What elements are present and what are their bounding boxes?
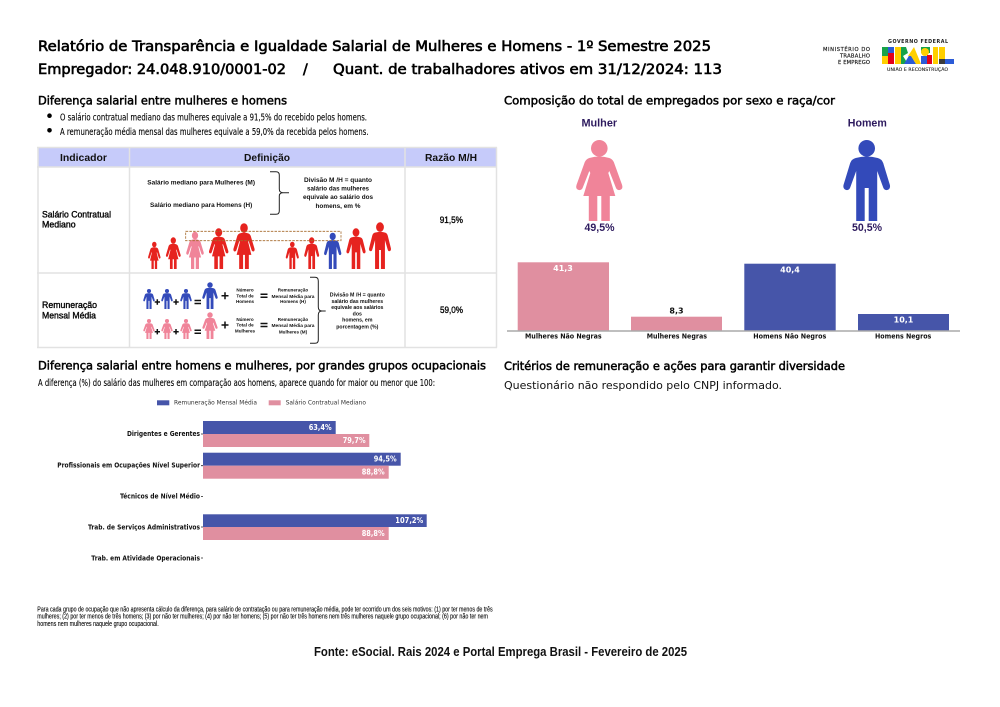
formula labels: Remuneração — [278, 317, 308, 322]
legend: Salário Contratual Mediano — [286, 399, 366, 407]
table header — [60, 152, 477, 164]
bar chart: sexo e raça: Homens Negros — [875, 332, 931, 340]
logo: governo federal brasil — [882, 39, 954, 73]
formula labels: Mulheres (M) — [279, 330, 308, 334]
table — [37, 148, 497, 348]
footnote: homens nem mulheres naquele grupo ocupacional. — [37, 621, 159, 628]
definição: divisão M/H — [303, 177, 374, 210]
definição: salário mediano — [147, 179, 255, 209]
panel: composição — [504, 93, 960, 340]
definição: divisão M/H: equivale aos salários — [331, 305, 384, 311]
title: / — [303, 62, 308, 78]
footnote — [37, 606, 493, 628]
logo: ministério: MINISTÉRIO DO — [823, 45, 870, 53]
icons: men sum — [143, 282, 218, 309]
definição: divisão M/H: salário das mulheres — [307, 186, 370, 192]
heading: critérios: Critérios de remuneração e ações para garantir diversidade — [504, 359, 845, 373]
title: Quant. de trabalhadores ativos em 31/12/2024: 113 — [333, 62, 722, 78]
bar chart: grupos ocupacionais — [57, 421, 427, 562]
row label: salário contratual mediano — [42, 210, 111, 230]
table header: Definição — [244, 152, 290, 164]
row label: remuneração mensal média — [42, 300, 97, 321]
logo: governo federal brasil: UNIÃO E RECONSTRUÇÃO — [887, 66, 948, 73]
bar chart: sexo e raça: Homens Não Negros — [753, 332, 826, 340]
definição: divisão M/H: homens, em — [342, 318, 373, 324]
footnote: Para cada grupo de ocupação que não apresenta cálculo da diferença, para salário de contratação ou para remuneração média, pode ter ocorrido um dos seis motivos: (1) por ter menos de três — [37, 606, 493, 613]
logo: ministério — [823, 45, 870, 66]
bar chart: grupos ocupacionais: Trab. em Atividade Operacionais — [91, 554, 200, 562]
definição: divisão M/H: porcentagem (%) — [336, 324, 379, 330]
formula labels: Mensal Média para — [272, 294, 315, 299]
pictogram: homem: Homem — [848, 118, 887, 130]
bar chart: grupos ocupacionais: 88,8% — [362, 529, 385, 538]
brace — [310, 277, 326, 343]
table header: Razão M/H — [425, 152, 477, 164]
footnote: mulheres; (2) por ter menos de três homens; (3) por não ter mulheres; (4) por não ter homens; (5) por não ter três homens nem três mulheres naquele grupo ocupacional; (6) por não ter nem — [37, 614, 488, 621]
text block: nota: A diferença (%) do salário das mulheres em comparação aos homens, aparece quando for maior ou menor que 100: — [38, 377, 435, 389]
definição: divisão M/H: equivale ao salário dos — [303, 194, 374, 201]
legend — [157, 399, 366, 407]
operators — [155, 292, 268, 334]
bar chart: grupos ocupacionais: Dirigentes e Gerentes — [127, 430, 200, 438]
icons: women figures — [148, 223, 255, 269]
bar chart: grupos ocupacionais: 94,5% — [374, 454, 397, 463]
definição: divisão M/H: Divisão M /H = quanto — [304, 177, 372, 184]
value: 59,0%: 59,0% — [440, 305, 463, 316]
formula labels: Total de — [236, 322, 254, 328]
formula labels: Remuneração — [278, 288, 308, 292]
formula labels: Homens — [236, 299, 255, 304]
bar chart: sexo e raça: 40,4 — [780, 266, 800, 275]
row label: remuneração mensal média: Remuneração — [42, 300, 97, 310]
text block: bullet list: O salário contratual mediano das mulheres equivale a 91,5% do recebido pelos homens. — [60, 112, 367, 124]
bar chart: sexo e raça — [507, 262, 960, 340]
pictogram: mulher — [576, 118, 622, 234]
definição: divisão M/H: homens, em % — [316, 203, 361, 210]
heading: grupos ocupacionais: Diferença salarial entre homens e mulheres, por grandes grupos ocupacionais — [38, 358, 486, 372]
panel: grupos ocupacionais — [37, 358, 493, 628]
bar chart: grupos ocupacionais: Trab. de Serviços Administrativos — [88, 523, 200, 531]
definição: salário mediano: Salário mediano para Homens (H) — [150, 202, 252, 209]
bar chart: grupos ocupacionais: Profissionais em Ocupações Nível Superior — [57, 462, 201, 470]
brace — [270, 172, 289, 214]
logo: governo federal brasil: GOVERNO FEDERAL — [888, 39, 948, 45]
row label: salário contratual mediano: Salário Contratual — [42, 210, 111, 220]
formula labels: Número — [236, 317, 254, 322]
median marker — [186, 231, 341, 241]
formula labels: Total de — [236, 294, 254, 298]
bar chart: grupos ocupacionais: 88,8% — [362, 467, 385, 476]
definição: divisão M/H: Divisão M /H = quanto — [330, 292, 385, 298]
definição: divisão M/H: salário das mulheres — [331, 299, 383, 305]
definição: divisão M/H: dos — [353, 312, 362, 318]
pictogram: mulher: 49,5% — [584, 222, 615, 234]
heading: composição: Composição do total de empregados por sexo e raça/cor — [504, 93, 835, 107]
formula labels — [235, 288, 315, 334]
title — [38, 39, 722, 78]
formula labels: Mulheres — [235, 328, 256, 334]
text block: bullet list: A remuneração média mensal das mulheres equivale a 59,0% da recebida pelos homens. — [60, 126, 368, 138]
panel: critérios — [504, 359, 845, 392]
legend: Remuneração Mensal Média — [174, 399, 257, 407]
value: 91,5%: 91,5% — [440, 215, 463, 226]
text block: bullet list — [47, 112, 368, 138]
row label: salário contratual mediano: Mediano — [42, 220, 76, 230]
bar chart: grupos ocupacionais: Técnicos de Nível Médio — [120, 492, 200, 500]
bar chart: sexo e raça: Mulheres Não Negras — [525, 332, 602, 340]
source: Fonte: eSocial. Rais 2024 e Portal Emprega Brasil - Fevereiro de 2025 — [314, 645, 687, 659]
title: Relatório de Transparência e Igualdade Salarial de Mulheres e Homens - 1º Semestre 2025 — [38, 39, 711, 55]
formula labels: Homens (H) — [280, 299, 306, 304]
bar chart: sexo e raça: Mulheres Negras — [647, 332, 707, 340]
formula labels: Número — [236, 288, 254, 292]
pictogram: homem — [843, 118, 890, 234]
pictogram: mulher: Mulher — [581, 118, 618, 130]
table header: Indicador — [60, 152, 107, 164]
bar chart: sexo e raça: 8,3 — [669, 306, 684, 315]
definição: salário mediano: Salário mediano para Mulheres (M) — [147, 179, 255, 186]
heading: diferença salarial: Diferença salarial entre mulheres e homens — [38, 93, 287, 107]
bar chart: grupos ocupacionais: 63,4% — [309, 423, 332, 432]
icons: men figures — [286, 222, 391, 269]
text block: critérios: Questionário não respondido pelo CNPJ informado. — [504, 379, 782, 392]
title: Empregador: 24.048.910/0001-02 — [38, 62, 286, 78]
bar chart: sexo e raça: 10,1 — [894, 316, 914, 325]
logo: ministério: TRABALHO — [839, 54, 870, 60]
formula labels: Mensal Média para — [272, 323, 315, 328]
pictogram: homem: 50,5% — [852, 222, 882, 234]
row label: remuneração mensal média: Mensal Média — [42, 311, 96, 321]
bar chart: grupos ocupacionais: 79,7% — [343, 436, 366, 445]
definição: divisão M/H — [330, 292, 385, 330]
panel: diferença salarial — [37, 93, 497, 348]
icons: women sum — [143, 312, 218, 339]
logo: ministério: E EMPREGO — [838, 60, 870, 66]
bar chart: grupos ocupacionais: 107,2% — [395, 516, 424, 525]
bar chart: sexo e raça: 41,3 — [553, 264, 573, 273]
